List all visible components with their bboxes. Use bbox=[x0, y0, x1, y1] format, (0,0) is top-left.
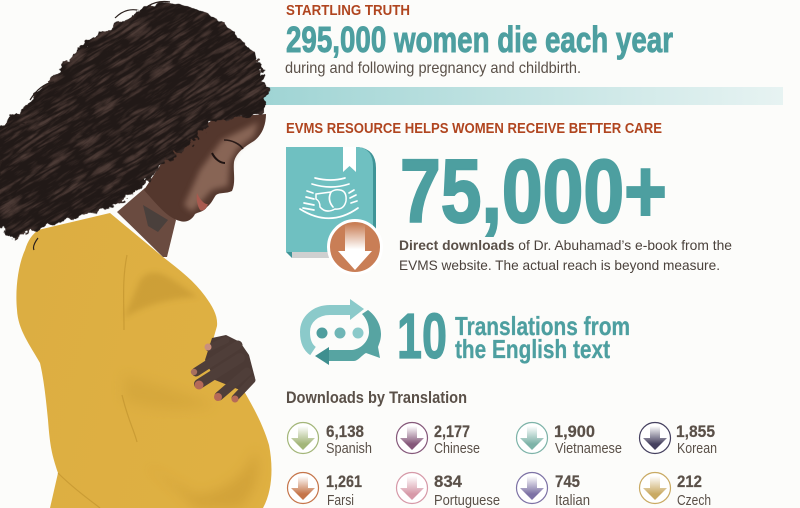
item: Vietnamese: Vietnamese bbox=[555, 440, 622, 457]
section: startling truth bbox=[285, 3, 673, 77]
item: Czech: 212 bbox=[677, 472, 702, 491]
heading: downloads by translation: Downloads by Translation bbox=[286, 389, 467, 407]
neck bbox=[117, 188, 176, 257]
item: Vietnamese bbox=[516, 422, 622, 457]
downloads description bbox=[399, 237, 732, 273]
item: Chinese: 2,177 bbox=[434, 422, 470, 441]
item: Czech bbox=[640, 472, 711, 508]
dots bbox=[316, 328, 328, 338]
gradient divider band bbox=[262, 87, 783, 105]
item: Chinese bbox=[396, 422, 480, 457]
download badge bbox=[328, 220, 382, 274]
translations statistic: 10 bbox=[397, 300, 447, 372]
translations statistic bbox=[397, 300, 630, 372]
hair bbox=[0, 0, 373, 364]
icon: translation speech arrows bbox=[305, 299, 381, 365]
item: Chinese: Chinese bbox=[434, 440, 480, 457]
ultrasound graphic bbox=[300, 178, 358, 218]
item: Spanish: Spanish bbox=[326, 440, 372, 457]
item: Farsi bbox=[288, 472, 362, 508]
subheading: during and following pregnancy and childbirth. bbox=[285, 60, 581, 77]
face highlights and features bbox=[184, 122, 258, 212]
item: Portuguese bbox=[396, 472, 500, 508]
item: Portuguese: 834 bbox=[434, 472, 463, 491]
section heading: EVMS resource: EVMS RESOURCE HELPS WOMEN RECEIVE BETTER CARE bbox=[286, 121, 662, 137]
hand on belly bbox=[191, 335, 255, 402]
item: Spanish bbox=[288, 422, 372, 457]
hair seen behind neck bbox=[143, 205, 168, 232]
eyebrow heading: STARTLING TRUTH bbox=[286, 3, 410, 19]
item: Farsi: 1,261 bbox=[326, 472, 362, 491]
stray curls bbox=[0, 2, 170, 250]
big statistic: 75,000+: 75,000+ bbox=[400, 142, 667, 242]
item: Korean bbox=[640, 422, 717, 457]
face bbox=[144, 114, 266, 222]
translations statistic: the English text bbox=[455, 334, 610, 364]
icon: e-book with download arrow bbox=[286, 147, 382, 274]
item: Spanish: 6,138 bbox=[326, 422, 364, 441]
item: Vietnamese: 1,900 bbox=[554, 422, 595, 441]
headline statistic: 295,000 women die each year bbox=[286, 19, 673, 60]
dress and body bbox=[16, 213, 271, 508]
translations statistic: Translations from bbox=[455, 311, 630, 341]
item: Korean: Korean bbox=[677, 440, 717, 457]
photo: pregnant woman in profile bbox=[0, 0, 373, 508]
item: Italian: 745 bbox=[555, 472, 580, 491]
item: Italian bbox=[516, 472, 590, 508]
item: Korean: 1,855 bbox=[676, 422, 715, 441]
downloads description: Direct downloads of Dr. Abuhamad’s e-book from the bbox=[399, 237, 732, 253]
downloads description: EVMS website. The actual reach is beyond measure. bbox=[399, 257, 720, 273]
